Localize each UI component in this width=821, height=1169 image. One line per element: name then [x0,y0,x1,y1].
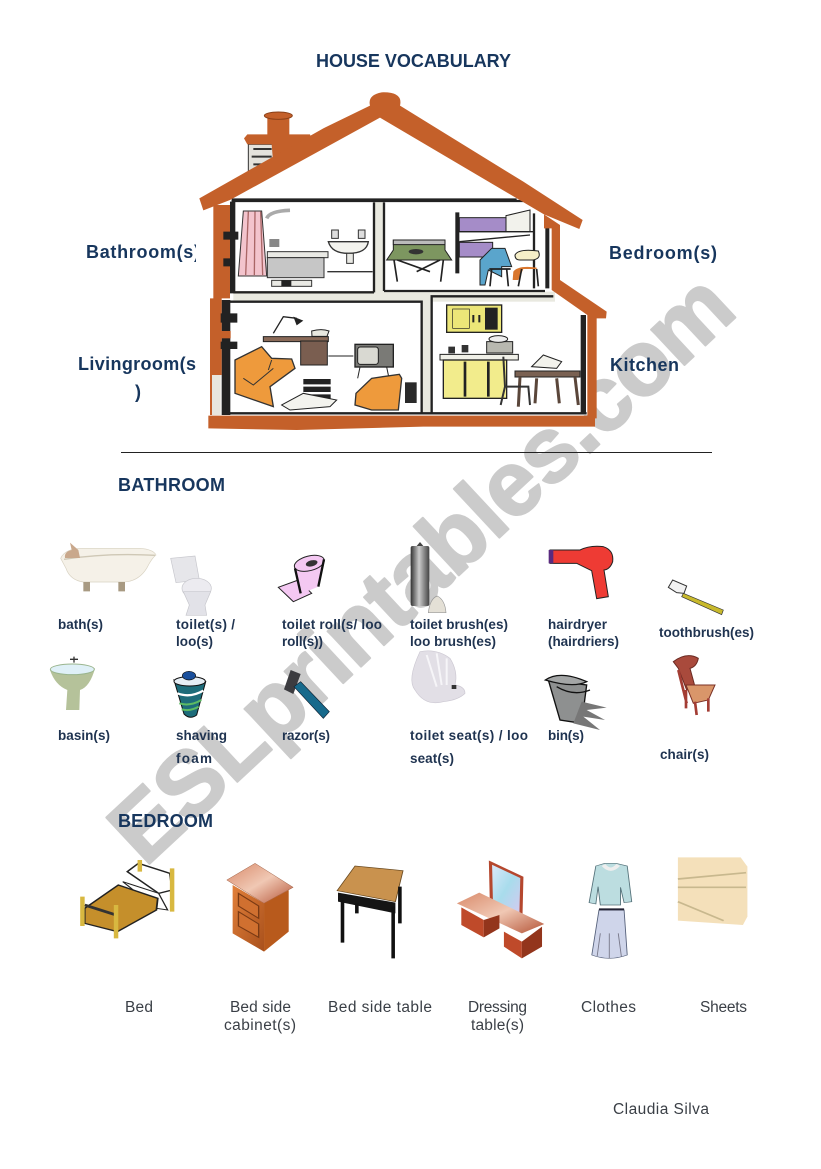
label: toilet: toilet(s) / [176,617,235,632]
label: razor: razor(s) [282,728,330,743]
icon: chair [673,656,715,715]
icon: toothbrush [668,580,723,615]
icon: bed [82,860,172,938]
label: toilet brush: loo brush(es) [410,634,496,649]
label: toilet brush: toilet brush(es) [410,617,508,632]
label: toilet seat: toilet seat(s) / loo [410,728,528,743]
watermark: ESLprintables.com [89,254,753,883]
bathroom items, left half [50,543,382,766]
label: hairdryer: hairdryer [548,617,608,632]
bedroom items [82,857,747,958]
label: basin: basin(s) [58,728,110,743]
icon: bin [545,675,607,730]
title: HOUSE VOCABULARY [316,51,511,71]
label: dressing table: table(s) [471,1017,524,1034]
icon: bedside table [337,866,403,958]
label: hairdryer: (hairdriers) [548,634,619,649]
room label: living room: Livingroom(s [78,354,196,374]
rooms and inner walls [226,118,595,415]
icon: dressing table [457,863,544,958]
icon: hairdryer [549,546,613,599]
room label: bedroom: Bedroom(s) [609,243,717,263]
room label: kitchen: Kitchen [610,355,679,375]
label: toilet seat: seat(s) [410,751,454,766]
label: hairdryer [548,617,619,649]
label: bedside cabinet [224,999,296,1034]
icon: basin [50,657,95,710]
bedroom labels [125,999,747,1034]
label: sheets: Sheets [700,999,747,1016]
label: toothbrush: toothbrush(es) [659,625,754,640]
label: bed: Bed [125,999,153,1016]
living room furniture [235,317,417,410]
label: shaving foam: shaving [176,728,227,743]
icon: bath [61,543,156,591]
label: bin: bin(s) [548,728,584,743]
bathroom furniture [238,210,373,286]
icon: shaving foam [174,671,206,717]
label: toilet [176,617,235,649]
icon: toilet [171,556,211,615]
kitchen furniture [440,305,580,407]
label: toilet brush [410,617,508,649]
icon: clothes [589,863,632,958]
label: toilet roll [282,617,382,649]
icon: toilet roll [278,553,326,602]
illustration: house cross-section [199,92,607,430]
bathroom items, right half [410,542,754,766]
label: shaving foam [176,728,227,766]
icon: razor [284,670,329,718]
icon: bedside cabinet [227,863,293,952]
label: toilet roll: toilet roll(s/ loo [282,617,382,632]
author credit: Claudia Silva [613,1101,709,1118]
label: dressing table: Dressing [468,999,527,1016]
heading: bedroom: BEDROOM [118,811,213,831]
label: chair: chair(s) [660,747,709,762]
label: bath: bath(s) [58,617,103,632]
icon: sheets [678,857,747,925]
heading: bathroom: BATHROOM [118,475,225,495]
label: clothes: Clothes [581,999,636,1016]
brick walls and roof [199,92,607,430]
bedroom furniture [387,210,539,288]
label: toilet roll: roll(s)) [282,634,323,649]
label: toilet seat [410,728,528,766]
icon: toilet brush [411,542,446,613]
room label: living room: ) [135,382,141,402]
chimney [244,112,311,172]
label: bedside table: Bed side table [328,999,432,1016]
label: dressing table [468,999,527,1034]
room label: living room [78,354,196,402]
label: shaving foam: foam [176,751,212,766]
icon: toilet seat [412,651,465,703]
label: bedside cabinet: cabinet(s) [224,1017,296,1034]
label: toilet: loo(s) [176,634,213,649]
room label: bathroom: Bathroom(s) [86,242,200,262]
label: bedside cabinet: Bed side [230,999,291,1016]
